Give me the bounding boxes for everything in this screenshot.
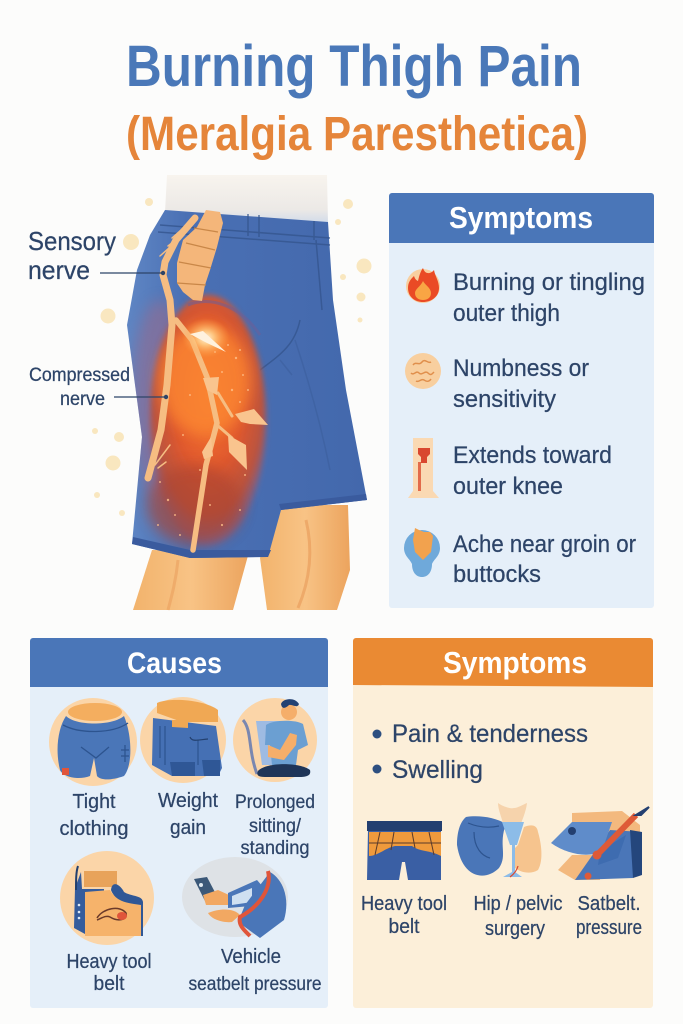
text: ache: buttocks — [453, 561, 541, 588]
label: tight clothing: Tight — [72, 791, 116, 813]
text: extends toward: Extends toward — [453, 442, 612, 469]
label: satbelt pressure — [576, 893, 642, 939]
label: vehicle seatbelt pressure: Vehicle — [221, 946, 281, 968]
label: heavy tool belt: belt — [94, 973, 125, 995]
nerve arrow shapes — [202, 377, 268, 470]
text: ache: Ache near groin or — [453, 531, 636, 558]
legs — [133, 550, 249, 610]
shorts hem — [132, 494, 367, 558]
panel header: Symptoms — [449, 200, 593, 235]
heat speckles — [157, 344, 249, 536]
title: (Meralgia Paresthetica) — [126, 108, 588, 161]
label: heavy tool belt: Heavy tool — [361, 893, 447, 915]
bullet list: Pain & tenderness — [392, 720, 588, 748]
panel header — [30, 638, 328, 687]
text: numbness: Numbness or — [453, 355, 589, 382]
panel: causes — [30, 638, 328, 1008]
label: satbelt pressure: Satbelt. — [578, 893, 640, 915]
text: extends toward: outer knee — [453, 473, 563, 500]
label: weight gain — [158, 790, 218, 839]
torso — [165, 175, 328, 224]
icon: weight gain — [140, 697, 226, 783]
icon: numbness — [405, 353, 441, 389]
label: tight clothing — [60, 791, 128, 840]
text: burning or tingling: outer thigh — [453, 300, 560, 327]
label: tight clothing: clothing — [60, 818, 128, 840]
label: vehicle seatbelt pressure — [188, 946, 322, 995]
label: hip surgery: surgery — [485, 918, 545, 940]
label: weight gain: gain — [170, 817, 206, 839]
panel: symptoms (blue) — [389, 193, 654, 608]
label: weight gain: Weight — [158, 790, 218, 812]
label: hip surgery: Hip / pelvic — [474, 893, 562, 915]
icon: flame — [406, 268, 440, 303]
label: heavy tool belt — [361, 893, 447, 938]
icon: hand on groin — [404, 528, 440, 577]
illustration: thigh with compressed nerve — [28, 175, 372, 610]
label: compressed nerve: Compressed — [29, 365, 130, 386]
label: sensory nerve — [28, 226, 165, 285]
label: compressed nerve — [29, 365, 168, 410]
background glow dots — [92, 198, 372, 516]
panel header: Causes — [127, 647, 222, 680]
icon: prolonged sitting — [233, 698, 317, 782]
text: ache — [453, 531, 636, 588]
text: numbness — [453, 355, 589, 413]
label: satbelt pressure: pressure — [576, 917, 642, 939]
shorts — [127, 210, 367, 558]
label: hip surgery — [474, 893, 562, 940]
panel header — [353, 638, 653, 687]
bullet list: Swelling — [392, 756, 483, 784]
bullet list — [372, 720, 588, 784]
nerves — [148, 218, 232, 550]
panel: symptoms (orange) — [353, 638, 653, 1008]
shorts details — [158, 214, 330, 470]
panel header — [389, 193, 654, 243]
label: sensory nerve: Sensory — [28, 226, 116, 256]
text: extends toward — [453, 442, 612, 500]
label: prolonged sitting/standing — [235, 791, 315, 859]
spine column — [177, 210, 223, 301]
label: prolonged sitting/standing: standing — [240, 837, 310, 859]
label: prolonged sitting/standing: sitting/ — [249, 815, 302, 837]
panel header: Symptoms — [443, 645, 587, 680]
icon: heavy tool belt shorts — [367, 821, 442, 880]
label: heavy tool belt: belt — [388, 916, 420, 938]
icon: hip surgery — [457, 803, 541, 877]
thigh heat area — [132, 295, 266, 545]
text: burning or tingling: Burning or tingling — [453, 269, 645, 296]
text: burning or tingling — [453, 269, 645, 327]
text: numbness: sensitivity — [453, 386, 557, 413]
icon: heavy tool belt — [60, 851, 154, 945]
compression flash — [182, 318, 230, 358]
label: prolonged sitting/standing: Prolonged — [235, 791, 315, 813]
label: sensory nerve: nerve — [28, 255, 90, 285]
label: heavy tool belt — [66, 951, 152, 995]
label: compressed nerve: nerve — [60, 389, 105, 410]
icon: vehicle seatbelt — [182, 857, 288, 938]
label: vehicle seatbelt pressure: seatbelt pressure — [188, 973, 322, 995]
title: Burning Thigh Pain — [126, 34, 582, 99]
icon: tight clothing — [49, 698, 137, 786]
icon: satbelt pressure — [551, 807, 649, 880]
label: heavy tool belt: Heavy tool — [66, 951, 152, 973]
title — [126, 34, 588, 161]
icon: leg — [408, 438, 439, 498]
